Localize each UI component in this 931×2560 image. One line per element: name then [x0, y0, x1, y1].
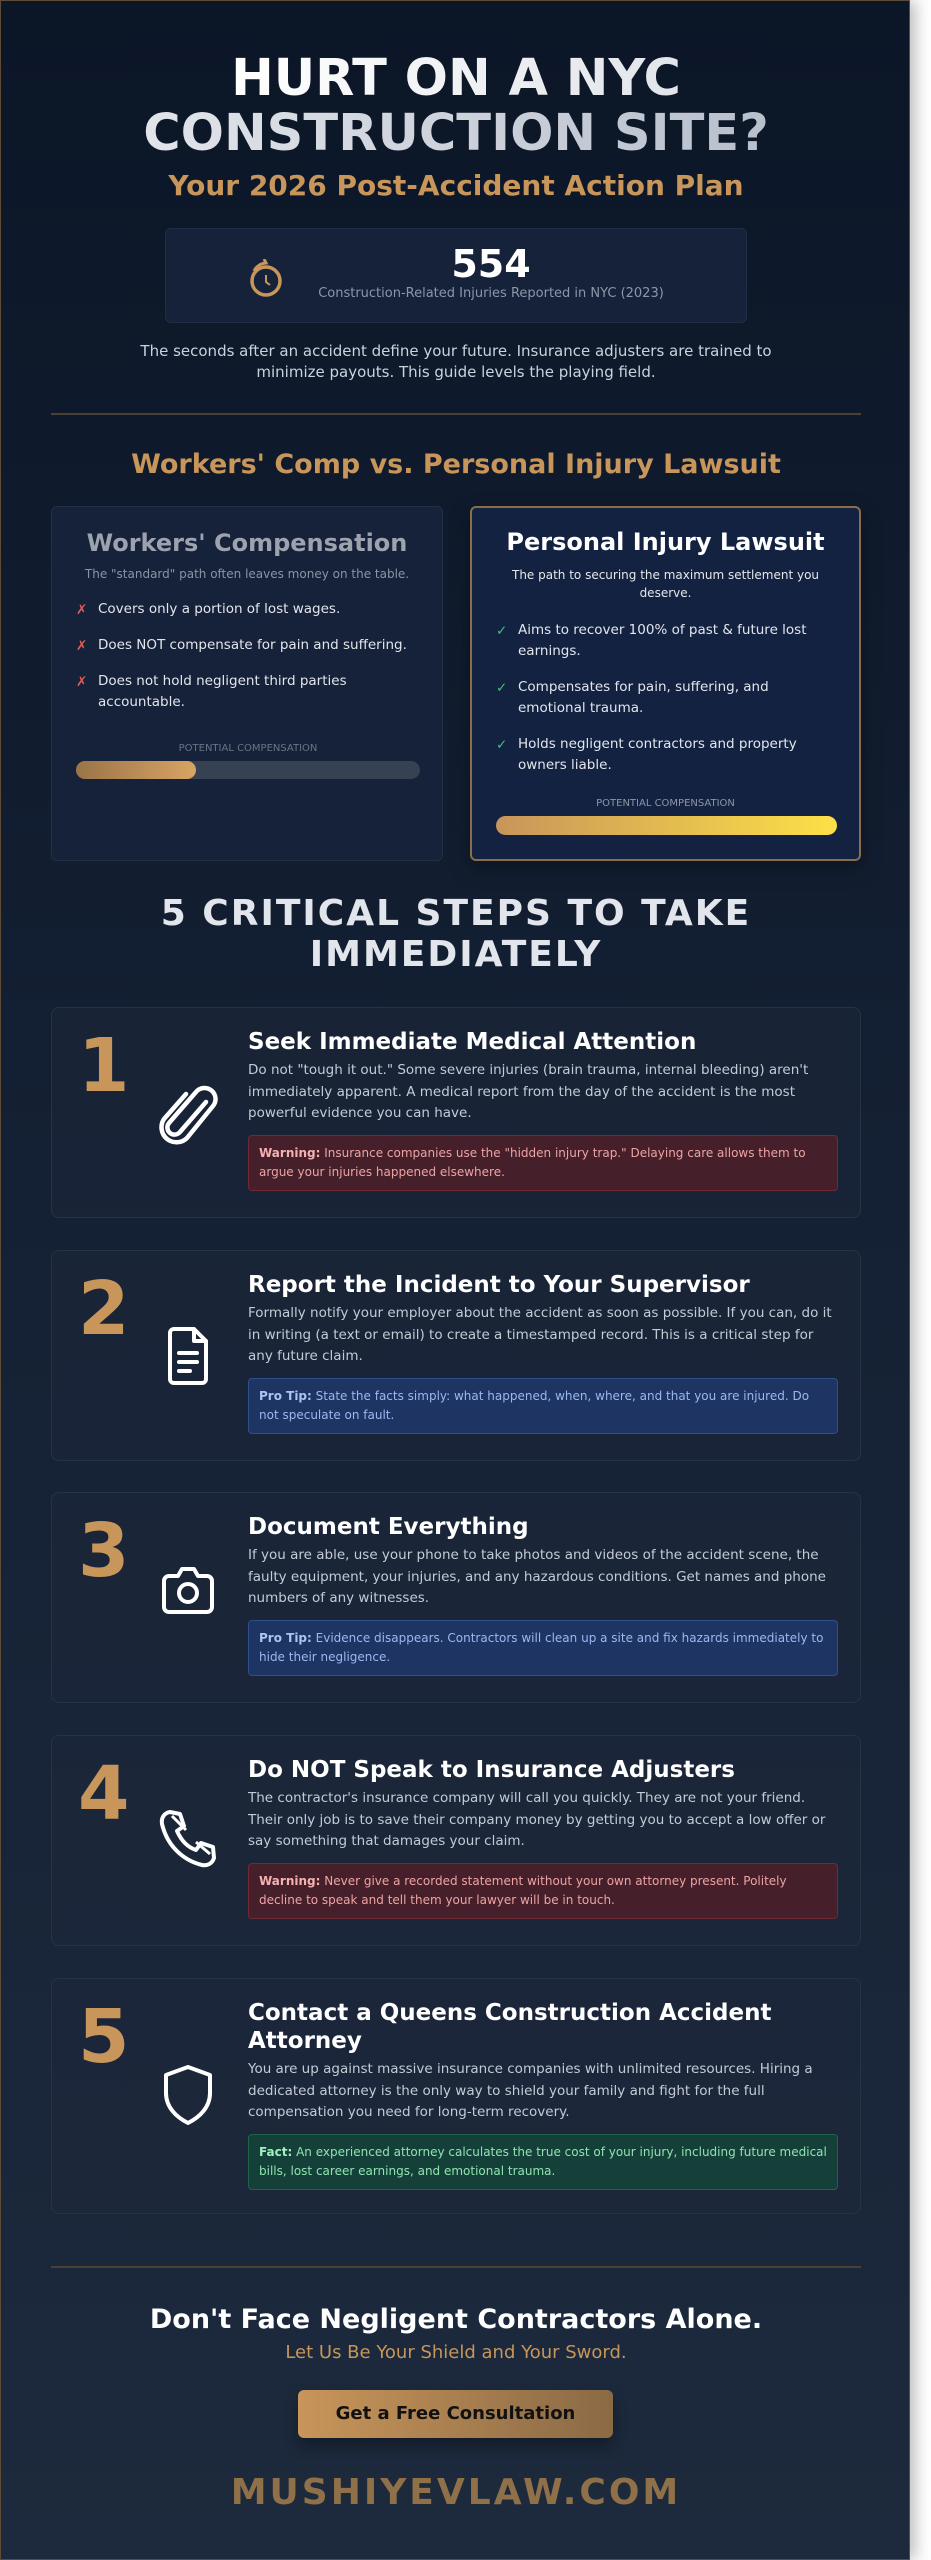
step 1	[51, 1007, 861, 1218]
step 5: Contact a Queens Construction Accident Attorney	[248, 2000, 771, 2054]
icon: stopwatch	[250, 259, 282, 297]
step 2: Formally notify your employer about the accident as soon as possible. If you can, do it in writing (a text or email) to create a timestamped record. This is a critical step for any future claim.	[248, 1305, 832, 1364]
intro text: The seconds after an accident define your future. Insurance adjusters are trained to minimize payouts. This guide levels the playing field.	[140, 342, 772, 381]
panel: personal injury: POTENTIAL COMPENSATION	[596, 798, 735, 809]
step 2: Report the Incident to Your Supervisor	[248, 1272, 750, 1298]
step 3	[51, 1492, 861, 1703]
panel: workers comp: ✗	[76, 674, 87, 690]
panel: personal injury	[470, 506, 861, 861]
section heading: steps	[161, 893, 751, 975]
stat caption: Construction-Related Injuries Reported in NYC (2023)	[318, 286, 664, 301]
step 4: The contractor's insurance company will call you quickly. They are not your friend. Their only job is to save their company money by getting you to accept a low offer or say something that damages your claim.	[248, 1790, 825, 1849]
step 5: You are up against massive insurance companies with unlimited resources. Hiring a dedicated attorney is the only way to shield your family and fight for the full compensation you need for long-term recovery.	[248, 2061, 813, 2120]
panel: personal injury: The path to securing the maximum settlement you deserve.	[512, 568, 819, 600]
panel: workers comp: POTENTIAL COMPENSATION	[179, 743, 317, 754]
icon: document	[168, 1327, 208, 1385]
panel: personal injury: ✓	[496, 737, 507, 753]
step 4: Do NOT Speak to Insurance Adjusters	[248, 1757, 735, 1783]
bar: personal injury	[496, 816, 837, 835]
title: CONSTRUCTION SITE?	[143, 104, 769, 163]
number 2: 2	[78, 1266, 130, 1352]
panel: workers comp: ✗	[76, 602, 87, 618]
bar: workers comp	[76, 761, 420, 779]
panel: workers comp	[51, 506, 443, 861]
section heading: comparison: Workers' Comp vs. Personal Injury Lawsuit	[131, 449, 781, 480]
step 2	[51, 1250, 861, 1461]
step 5: Fact: An experienced attorney calculates the true cost of your injury, including future medical bills, lost career earnings, and emotional trauma.	[259, 2144, 827, 2178]
step 1: Seek Immediate Medical Attention	[248, 1029, 696, 1055]
panel: personal injury: Aims to recover 100% of past & future lost earnings.	[518, 622, 806, 659]
panel: workers comp: Does NOT compensate for pain and suffering.	[98, 637, 407, 653]
panel: personal injury: Holds negligent contractors and property owners liable.	[518, 736, 797, 773]
step 4: Warning: Never give a recorded statement without your own attorney present. Politely decline to speak and tell them your lawyer will be in touch.	[259, 1874, 787, 1906]
panel: workers comp: Does not hold negligent third parties accountable.	[98, 673, 347, 710]
step 1: Do not "tough it out." Some severe injuries (brain trauma, internal bleeding) aren't immediately apparent. A medical report from the day of the accident is the most powerful evidence you can have.	[248, 1062, 808, 1121]
panel: workers comp: The "standard" path often leaves money on the table.	[85, 567, 409, 581]
number 4: 4	[78, 1751, 130, 1837]
number 5: 5	[78, 1994, 130, 2080]
panel: workers comp: ✗	[76, 638, 87, 654]
panel: personal injury: ✓	[496, 623, 507, 639]
closing tagline: Let Us Be Your Shield and Your Sword.	[285, 2342, 627, 2363]
panel: personal injury: Compensates for pain, suffering, and emotional trauma.	[518, 679, 769, 716]
step 3: If you are able, use your phone to take photos and videos of the accident scene, the faulty equipment, your injuries, and any hazardous conditions. Get names and phone numbers of any witnesses.	[248, 1547, 826, 1606]
subtitle: Your 2026 Post-Accident Action Plan	[168, 169, 744, 202]
section heading: steps: 5 CRITICAL STEPS TO TAKE	[161, 893, 751, 934]
panel: workers comp: Workers' Compensation	[87, 529, 407, 557]
icon: paperclip	[159, 1086, 218, 1144]
panel: personal injury: ✓	[496, 680, 507, 696]
stat box	[165, 228, 747, 323]
step 2: Pro Tip: State the facts simply: what happened, when, where, and that you are injured. Do not speculate on fault.	[259, 1388, 809, 1422]
button: consultation	[298, 2390, 613, 2438]
icon: shield	[164, 2065, 212, 2125]
panel: workers comp: Covers only a portion of lost wages.	[98, 601, 340, 617]
step 1: Warning: Insurance companies use the "hidden injury trap." Delaying care allows them to argue your injuries happened elsewhere.	[259, 1146, 806, 1178]
title	[143, 49, 769, 163]
closing heading: Don't Face Negligent Contractors Alone.	[150, 2304, 762, 2335]
step 4	[51, 1735, 861, 1946]
step 5	[51, 1978, 861, 2214]
stat number: 554	[451, 242, 531, 286]
number 1: 1	[78, 1023, 130, 1109]
step 3: Document Everything	[248, 1514, 529, 1540]
section heading: steps: IMMEDIATELY	[310, 934, 602, 975]
number 3: 3	[78, 1508, 130, 1594]
panel: personal injury: Personal Injury Lawsuit	[506, 528, 825, 556]
button: consultation: Get a Free Consultation	[336, 2403, 575, 2424]
icon: phone	[160, 1810, 216, 1868]
website: MUSHIYEVLAW.COM	[231, 2472, 681, 2513]
step 3: Pro Tip: Evidence disappears. Contractors will clean up a site and fix hazards immediately to hide their negligence.	[259, 1630, 823, 1664]
title: HURT ON A NYC	[231, 49, 681, 108]
icon: camera	[162, 1567, 214, 1614]
